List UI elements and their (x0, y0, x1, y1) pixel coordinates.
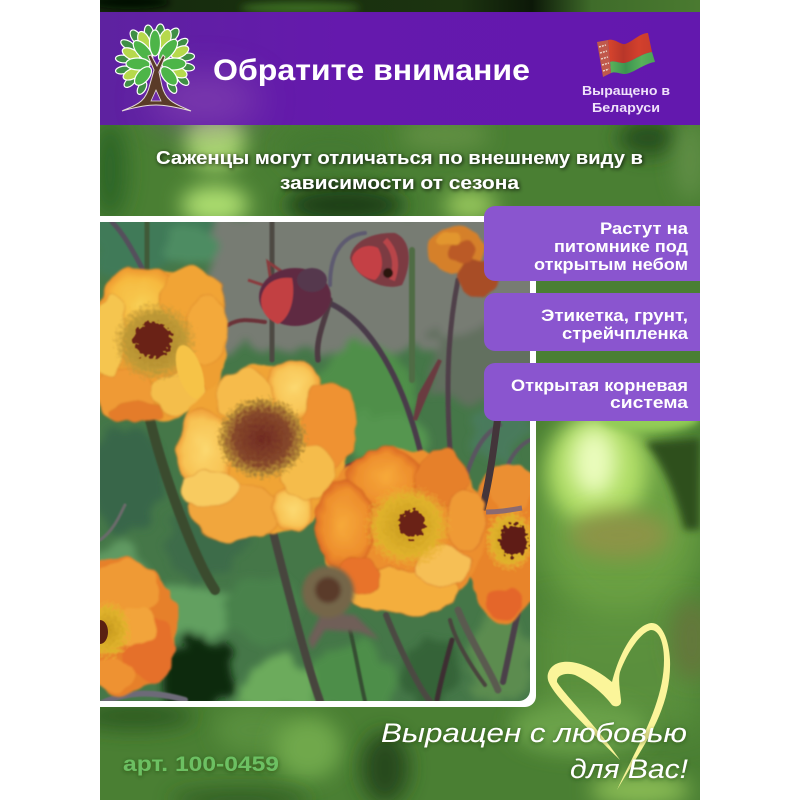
flower 4 (469, 462, 530, 626)
icon: tree trunk (122, 55, 191, 111)
callout: grown outdoors: Растут на (600, 219, 689, 238)
flower 1 center (113, 302, 205, 389)
bud 2 (350, 233, 409, 287)
callout: label, soil, stretch film (484, 293, 714, 351)
badge caption (582, 83, 670, 115)
slogan (381, 718, 689, 784)
callout: label, soil, stretch film: стрейчпленка (562, 324, 689, 343)
icon: tree logo (115, 24, 195, 96)
callout: grown outdoors (484, 206, 714, 281)
flower 3 center (364, 484, 452, 568)
title: Обратите внимание (213, 54, 530, 87)
article number: арт. 100-0459 (123, 753, 279, 776)
top right flower (426, 226, 498, 298)
notice text: Саженцы могут отличаться по внешнему виду в (156, 147, 643, 168)
photo background foliage (100, 222, 530, 701)
callout: open root system (484, 363, 714, 421)
callout: grown outdoors: открытым небом (534, 255, 688, 274)
badge caption: Выращено в (582, 83, 670, 98)
flower 1 (88, 267, 228, 422)
flower 4 center and stem (481, 420, 530, 571)
flower 2 center (216, 396, 308, 480)
callout: grown outdoors: питомнике под (554, 237, 688, 256)
notice text: зависимости от сезона (280, 172, 520, 193)
photo stems (100, 222, 530, 704)
icon: hand-drawn heart (548, 623, 670, 790)
callout: label, soil, stretch film: Этикетка, грунт, (541, 306, 688, 325)
icon: flag of Belarus (597, 33, 655, 77)
flower 5 center (100, 603, 130, 660)
photo: orange geum flowers (100, 222, 530, 701)
callout: open root system: система (610, 393, 689, 412)
dim flower (302, 566, 380, 650)
notice text (156, 147, 643, 193)
flower 2 (177, 358, 357, 542)
flower 3 (315, 448, 486, 616)
slogan: Выращен с любовью (381, 718, 687, 748)
flower 5 (100, 554, 180, 698)
bud 1 (248, 262, 331, 326)
background: blurred green foliage (75, 0, 714, 800)
slogan: для Вас! (570, 754, 689, 784)
header band (100, 12, 700, 126)
badge caption: Беларуси (592, 100, 660, 115)
photo frame (100, 216, 536, 707)
callout: open root system: Открытая корневая (511, 376, 688, 395)
